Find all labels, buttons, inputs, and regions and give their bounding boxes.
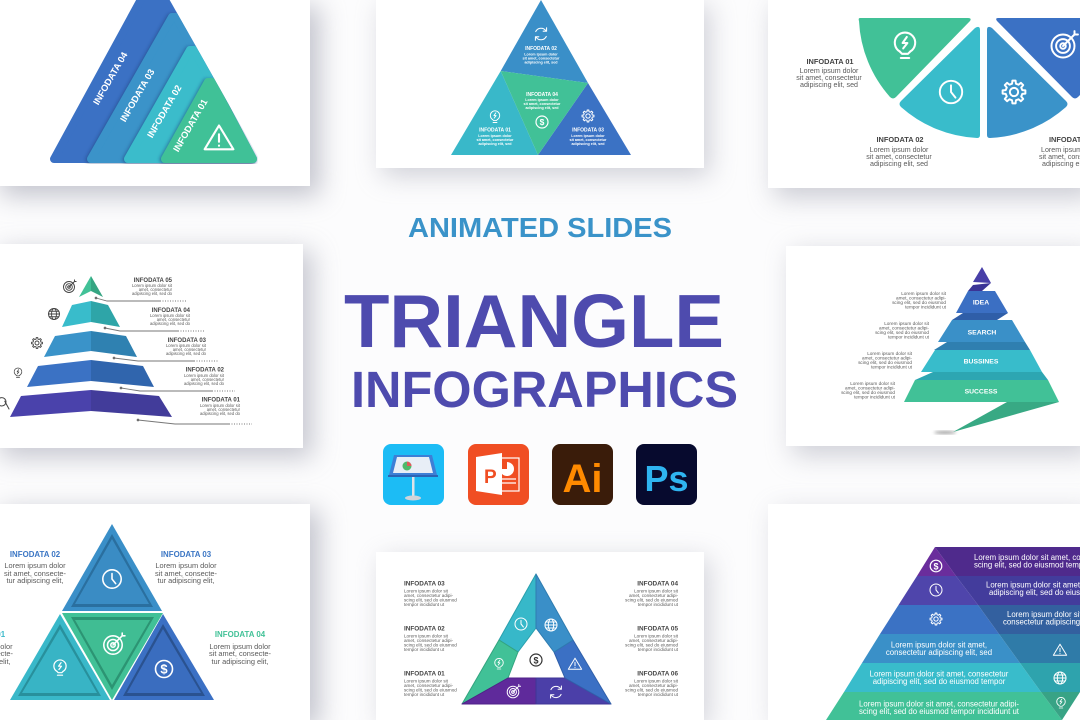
- panel: stacked pyramid: INFODATA 01: [202, 398, 241, 404]
- panel: split triangle: Lorem ipsum dolor: [525, 98, 559, 102]
- panel: hollow triangle: Lorem ipsum dolor sit: [404, 634, 449, 638]
- panel: layered band pyramid: Lorem ipsum dolor sit amet, consectetur adipi-: [859, 700, 1019, 708]
- panel: folded ribbon pyramid: tempor incididunt ut: [905, 304, 947, 310]
- panel: folded ribbon pyramid: amet, consectetur adipi-: [879, 326, 929, 330]
- panel: stacked pyramid: adipiscing elit, sed do: [166, 351, 207, 356]
- panel: hollow triangle: scing elit, sed do eiusmod: [625, 642, 678, 648]
- panel: folded ribbon pyramid: tempor incididunt ut: [888, 334, 930, 340]
- panel: peeled triangle: [0, 0, 320, 196]
- panel: folded ribbon pyramid: BUSSINES: [964, 358, 999, 366]
- icon: powerpoint: P: [484, 467, 497, 488]
- panel: layered band pyramid: [768, 504, 1080, 720]
- title: infographics: INFOGRAPHICS: [351, 361, 738, 418]
- panel: split triangle: Lorem ipsum dolor: [478, 134, 512, 138]
- panel: folded ribbon pyramid: amet, consectetur adipi-: [862, 356, 912, 360]
- panel: fan wedges: sit amet, consectetur: [796, 74, 862, 82]
- panel: peeled triangle: INFODATA 03: [118, 67, 157, 124]
- panel: fan wedges: Lorem ipsum dolor: [870, 146, 929, 154]
- panel: four nested triangles: sit amet, consecte-: [155, 569, 218, 578]
- panel: stacked pyramid: INFODATA 04: [152, 308, 191, 314]
- panel: stacked pyramid: amet, consectetur: [139, 287, 173, 292]
- panel: hollow triangle: scing elit, sed do eiusmod: [404, 688, 457, 692]
- panel: stacked pyramid: adipiscing elit, sed do: [184, 381, 225, 386]
- panel: split triangle: INFODATA 04: [526, 92, 558, 98]
- panel: four nested triangles: INFODATA 02: [10, 550, 61, 559]
- panel: folded ribbon pyramid: scing elit, sed do eiusmod: [892, 300, 946, 305]
- panel: stacked pyramid: [0, 244, 313, 458]
- panel: hollow triangle: Lorem ipsum dolor sit: [634, 634, 679, 638]
- panel: folded ribbon pyramid: SUCCESS: [965, 388, 998, 396]
- panel: hollow triangle: amet, consectetur adipi-: [404, 638, 453, 643]
- icon: dollar: $: [933, 561, 939, 571]
- panel: hollow triangle: scing elit, sed do eiusmod: [625, 598, 678, 602]
- panel: folded ribbon pyramid: Lorem ipsum dolor sit: [867, 351, 913, 356]
- panel: hollow triangle: amet, consectetur adipi-: [629, 593, 678, 598]
- panel: hollow triangle: Lorem ipsum dolor sit: [404, 588, 449, 594]
- panel: stacked pyramid: amet, consectetur: [173, 347, 207, 352]
- panel: four nested triangles: Lorem ipsum dolor: [209, 642, 271, 651]
- icon: photoshop: Ps: [644, 458, 689, 499]
- panel: hollow triangle: tempor incididunt ut: [638, 692, 679, 697]
- panel: fan wedges: [768, 0, 1080, 198]
- icon: dollar: $: [540, 117, 545, 127]
- panel: stacked pyramid: adipiscing elit, sed do: [200, 411, 241, 416]
- panel: split triangle: Lorem ipsum dolor: [571, 134, 605, 138]
- panel: stacked pyramid: Lorem ipsum dolor sit: [166, 343, 207, 348]
- panel: stacked pyramid: Lorem ipsum dolor sit: [184, 373, 225, 378]
- panel: peeled triangle: INFODATA 01: [171, 97, 210, 154]
- panel: four nested triangles: tur adipiscing elit,: [6, 576, 64, 585]
- panel: four nested triangles: tur adipiscing elit,: [211, 657, 269, 666]
- panel: folded ribbon pyramid: SEARCH: [968, 330, 996, 336]
- icons: pyramid side icons: [0, 280, 76, 409]
- panel: folded ribbon pyramid: amet, consectetur adipi-: [845, 386, 895, 390]
- panel: folded ribbon pyramid: tempor incididunt ut: [854, 394, 896, 400]
- panel: hollow triangle: INFODATA 03: [404, 580, 445, 588]
- panel: split triangle: [376, 0, 710, 176]
- panel: hollow triangle: INFODATA 01: [404, 670, 445, 678]
- panel: hollow triangle: Lorem ipsum dolor sit: [634, 678, 679, 684]
- panel: split triangle: Lorem ipsum dolor: [524, 52, 558, 56]
- panel: folded ribbon pyramid: scing elit, sed do eiusmod: [875, 330, 929, 335]
- panel: fan wedges: sit amet, consectetur: [866, 153, 932, 161]
- panel: hollow triangle: amet, consectetur adipi-: [404, 593, 453, 598]
- panel: stacked pyramid: amet, consectetur: [191, 377, 225, 382]
- icon: illustrator: [552, 444, 613, 505]
- panel: stacked pyramid: Lorem ipsum dolor sit: [150, 313, 191, 318]
- panel: hollow triangle: INFODATA 06: [637, 670, 678, 678]
- panel: four nested triangles: Lorem ipsum dolor: [155, 561, 217, 570]
- panel: hollow triangle: tempor incididunt ut: [404, 602, 445, 607]
- panel: hollow triangle: Lorem ipsum dolor sit: [404, 678, 449, 684]
- panel: hollow triangle: amet, consectetur adipi-: [629, 683, 678, 688]
- panel: stacked pyramid: Lorem ipsum dolor sit: [200, 403, 241, 408]
- subtitle: ANIMATED SLIDES: [408, 212, 672, 243]
- leader lines: [95, 297, 252, 424]
- panel: peeled triangle: INFODATA 04: [91, 50, 130, 107]
- panel: stacked pyramid: INFODATA 05: [134, 278, 173, 284]
- panel: stacked pyramid: amet, consectetur: [207, 407, 241, 412]
- panel: four nested triangles: INFODATA 03: [161, 550, 212, 559]
- panel: hollow triangle: scing elit, sed do eiusmod: [625, 688, 678, 692]
- panel: hollow triangle: Lorem ipsum dolor sit: [634, 588, 679, 594]
- panel: fan wedges: adipiscing elit, sed: [800, 81, 858, 89]
- panel: layered band pyramid: adipiscing elit, sed do eiusmod tempor: [873, 677, 1006, 686]
- panel: layered band pyramid: consectetur adipiscing elit, sed: [886, 648, 992, 657]
- panel: split triangle: sit amet, consectetur: [524, 102, 561, 106]
- panel: split triangle: sit amet, consectetur: [523, 56, 560, 60]
- icon: dollar: $: [160, 662, 168, 676]
- panel: folded ribbon pyramid: Lorem ipsum dolor sit: [850, 381, 896, 386]
- panel: hollow triangle: tempor incididunt ut: [638, 602, 679, 607]
- panel: folded ribbon pyramid: amet, consectetur adipi-: [896, 296, 946, 300]
- panel: hollow triangle: [376, 552, 710, 720]
- panel: hollow triangle: amet, consectetur adipi-: [629, 638, 678, 643]
- icon: warning: [205, 126, 233, 149]
- panel: peeled triangle: INFODATA 02: [145, 83, 184, 140]
- panel: fan wedges: Lorem ipsum dolor: [800, 67, 859, 75]
- panel: stacked pyramid: adipiscing elit, sed do: [150, 321, 191, 326]
- panel: hollow triangle: scing elit, sed do eiusmod: [404, 642, 457, 648]
- panel: split triangle: adipiscing elit, sed: [572, 142, 605, 146]
- panel: hollow triangle: scing elit, sed do eiusmod: [404, 598, 457, 602]
- panel: split triangle: INFODATA 01: [479, 128, 511, 134]
- panel: split triangle: adipiscing elit, sed: [478, 142, 512, 146]
- icon: keynote: [383, 444, 444, 505]
- icon: powerpoint: [468, 444, 529, 505]
- panel: four nested triangles: INFODATA 04: [215, 630, 266, 639]
- panel: split triangle: adipiscing elit, sed: [524, 60, 558, 64]
- panel: hollow triangle: tempor incididunt ut: [638, 647, 679, 652]
- icon: dollar: $: [533, 655, 539, 665]
- icon: photoshop: [636, 444, 697, 505]
- panel: fan wedges: INFODATA 02: [876, 135, 924, 144]
- icon: dollar: [536, 116, 548, 128]
- panel: layered band pyramid: Lorem ipsum dolor sit amet,: [891, 640, 987, 650]
- panel: hollow triangle: INFODATA 02: [404, 626, 445, 632]
- panel: layered band pyramid: Lorem ipsum dolor sit amet, consectetur: [870, 670, 1009, 678]
- icon: dollar: [530, 654, 542, 666]
- icon: dollar: [156, 660, 172, 678]
- panel: hollow triangle: tempor incididunt ut: [404, 647, 445, 652]
- panel: four nested triangles: Lorem ipsum dolor: [4, 561, 66, 570]
- panel: folded ribbon pyramid: [786, 246, 1080, 456]
- panel: four nested triangles: [0, 504, 320, 720]
- panel: stacked pyramid: Lorem ipsum dolor sit: [132, 283, 173, 288]
- panel: fan wedges: INFODATA 01: [806, 57, 854, 66]
- panel: hollow triangle: INFODATA 05: [637, 626, 678, 632]
- panel: split triangle: sit amet, consectetur: [477, 138, 514, 142]
- panel: stacked pyramid: amet, consectetur: [157, 317, 191, 322]
- panel: folded ribbon pyramid: scing elit, sed do eiusmod: [858, 360, 912, 365]
- panel: layered band pyramid: scing elit, sed do eiusmod tempor incididunt ut: [859, 707, 1020, 716]
- panel: folded ribbon pyramid: Lorem ipsum dolor sit: [884, 321, 930, 326]
- panel: four nested triangles: tur adipiscing elit,: [157, 576, 215, 585]
- panel: folded ribbon pyramid: tempor incididunt ut: [871, 364, 913, 370]
- panel: fan wedges: adipiscing elit, sed: [870, 160, 928, 168]
- title: triangle: TRIANGLE: [344, 279, 724, 363]
- panel: stacked pyramid: adipiscing elit, sed do: [132, 291, 173, 296]
- panel: stacked pyramid: INFODATA 02: [186, 368, 225, 374]
- panel: folded ribbon pyramid: Lorem ipsum dolor sit: [901, 291, 947, 296]
- panel: split triangle: sit amet, consectetur: [570, 138, 607, 142]
- panel: folded ribbon pyramid: IDEA: [973, 300, 989, 306]
- panel: split triangle: INFODATA 03: [572, 128, 604, 134]
- panel: hollow triangle: INFODATA 04: [637, 580, 678, 588]
- panel: stacked pyramid: INFODATA 03: [168, 338, 207, 344]
- panel: hollow triangle: amet, consectetur adipi-: [404, 683, 453, 688]
- panel: folded ribbon pyramid: scing elit, sed do eiusmod: [841, 390, 895, 395]
- icon: illustrator: Ai: [562, 457, 602, 501]
- panel: split triangle: adipiscing elit, sed: [526, 106, 559, 110]
- panel: four nested triangles: sit amet, consecte-: [4, 569, 67, 578]
- panel: four nested triangles: sit amet, consecte-: [209, 649, 272, 658]
- icon: dollar: [930, 560, 942, 572]
- panel: split triangle: INFODATA 02: [525, 46, 557, 52]
- panel: hollow triangle: tempor incididunt ut: [404, 692, 445, 697]
